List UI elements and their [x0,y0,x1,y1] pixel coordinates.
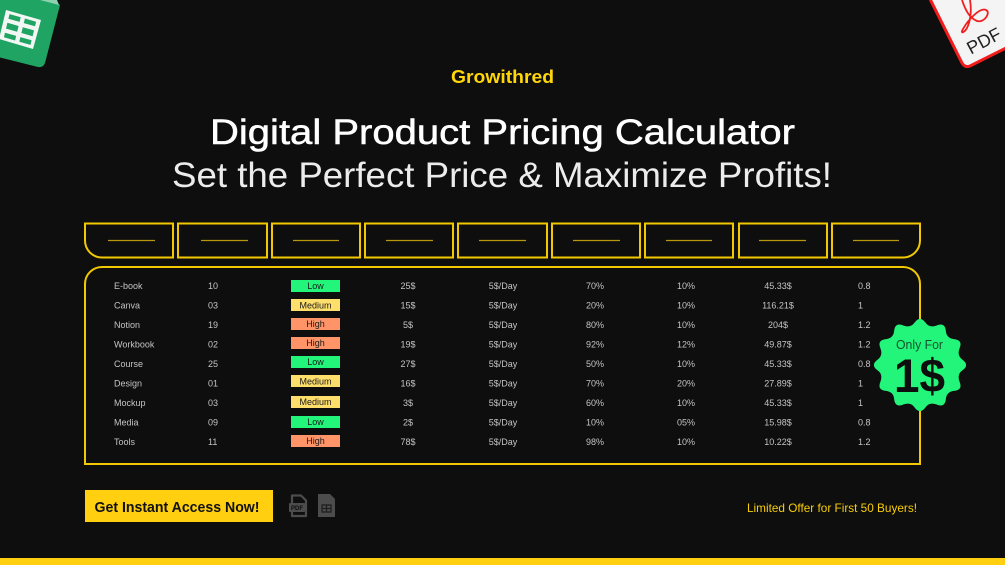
row: Media: 05% [677,418,695,428]
row: Mockup: 10% [677,398,695,408]
row: Course: Low [307,357,324,367]
table panel [85,267,920,464]
row: Canva: 1 [858,300,863,310]
row: Mockup: 3$ [403,398,413,408]
row: Design: 1 [858,378,863,388]
row: Tools: High [306,436,325,446]
row: Notion: 5$ [403,320,413,330]
row: Workbook: Workbook [114,340,155,350]
row: Course: 5$/Day [489,359,518,369]
row: E-book: 45.33$ [764,281,792,291]
row: Workbook: 92% [586,340,604,350]
row: Design: 27.89$ [764,378,792,388]
row: Workbook [114,337,871,350]
row: Notion: High [306,319,325,329]
row: Course: 0.8 [858,359,871,369]
row: Media: 0.8 [858,418,871,428]
row: Notion: Notion [114,320,140,330]
row: E-book: 70% [586,281,604,291]
row: Canva: Canva [114,300,140,310]
row: E-book: 10 [208,281,218,291]
row: Workbook: 02 [208,340,218,350]
title: Digital Product Pricing Calculator [210,113,795,152]
row: Notion: 1.2 [858,320,871,330]
row: Media: 15.98$ [764,418,792,428]
row: Mockup: Medium [299,397,332,407]
row: Course: 45.33$ [764,359,792,369]
icon: PDF format: PDF [291,506,303,512]
row: Notion: 10% [677,320,695,330]
row: Mockup [114,396,863,408]
row: Tools: 10.22$ [764,437,792,447]
row: Media: 5$/Day [489,418,518,428]
row: Notion [114,318,871,330]
row: Design: 5$/Day [489,378,518,388]
row: Mockup: 45.33$ [764,398,792,408]
row: Media: Media [114,418,139,428]
icon: PDF format [289,496,306,516]
row: Notion: 19 [208,320,218,330]
price badge [874,319,966,411]
row: E-book [114,280,871,292]
row: Canva [114,299,863,311]
row: Media: 09 [208,418,218,428]
row: Canva: 03 [208,300,218,310]
row: Course: 50% [586,359,604,369]
CTA button: Get Instant Access Now! [94,499,260,516]
row: Design: 01 [208,378,218,388]
row: Tools: 10% [677,437,695,447]
row: Workbook: 5$/Day [489,340,518,350]
row: E-book: 25$ [400,281,416,291]
icon: sheet format [318,494,335,517]
row: Design [114,375,863,388]
icon: spreadsheet file [0,0,60,67]
row: Design: 20% [677,378,695,388]
bottom bar [0,558,1005,565]
row: Canva: 15$ [400,300,416,310]
row: Mockup: 5$/Day [489,398,518,408]
row: Workbook: 19$ [400,340,416,350]
row: Course: Course [114,359,143,369]
offer note: Limited Offer for First 50 Buyers! [747,501,917,515]
row: Design: 70% [586,378,604,388]
subtitle: Set the Perfect Price & Maximize Profits! [172,156,832,195]
row: E-book: 0.8 [858,281,871,291]
row: Workbook: 1.2 [858,340,871,350]
row: E-book: 5$/Day [489,281,518,291]
row: Tools: 1.2 [858,437,871,447]
row: Course: 25 [208,359,218,369]
row: Design: Design [114,378,142,388]
row: Mockup: 60% [586,398,604,408]
row: Mockup: Mockup [114,398,146,408]
row: Tools: 11 [208,437,217,447]
icon: PDF swoosh [962,0,988,32]
table header row [85,224,920,258]
row: Tools: 5$/Day [489,437,518,447]
row: E-book: E-book [114,281,143,291]
row: Design: 16$ [400,378,416,388]
row: Workbook: High [306,338,325,348]
row: Media [114,416,871,428]
row: Course: 27$ [400,359,416,369]
row: Media: 10% [586,418,604,428]
row: Design: Medium [299,376,332,386]
row: Tools: Tools [114,437,136,447]
row: Notion: 204$ [768,320,788,330]
PDF label: PDF [963,24,1005,58]
row: Canva: 10% [677,300,695,310]
row: Canva: 116.21$ [762,300,794,310]
row: Canva: Medium [299,300,332,310]
table rows [114,280,871,447]
row: Media: 2$ [403,418,413,428]
row: Mockup: 03 [208,398,218,408]
row: Notion: 5$/Day [489,320,518,330]
row: Notion: 80% [586,320,604,330]
badge price: 1$ [894,349,945,402]
row: Course [114,356,871,369]
row: E-book: Low [307,281,324,291]
row: Workbook: 49.87$ [764,340,792,350]
row: E-book: 10% [677,281,695,291]
row: Canva: 20% [586,300,604,310]
brand logo: Growithred [451,67,554,87]
row: Mockup: 1 [858,398,863,408]
CTA button [85,490,273,522]
icon: PDF file [928,0,1005,67]
row: Canva: 5$/Day [489,300,518,310]
row: Tools: 98% [586,437,604,447]
row: Workbook: 12% [677,340,695,350]
row: Media: Low [307,417,324,427]
row: Course: 10% [677,359,695,369]
badge label: Only For [896,337,944,352]
row: Tools: 78$ [400,437,416,447]
row: Tools [114,435,871,447]
